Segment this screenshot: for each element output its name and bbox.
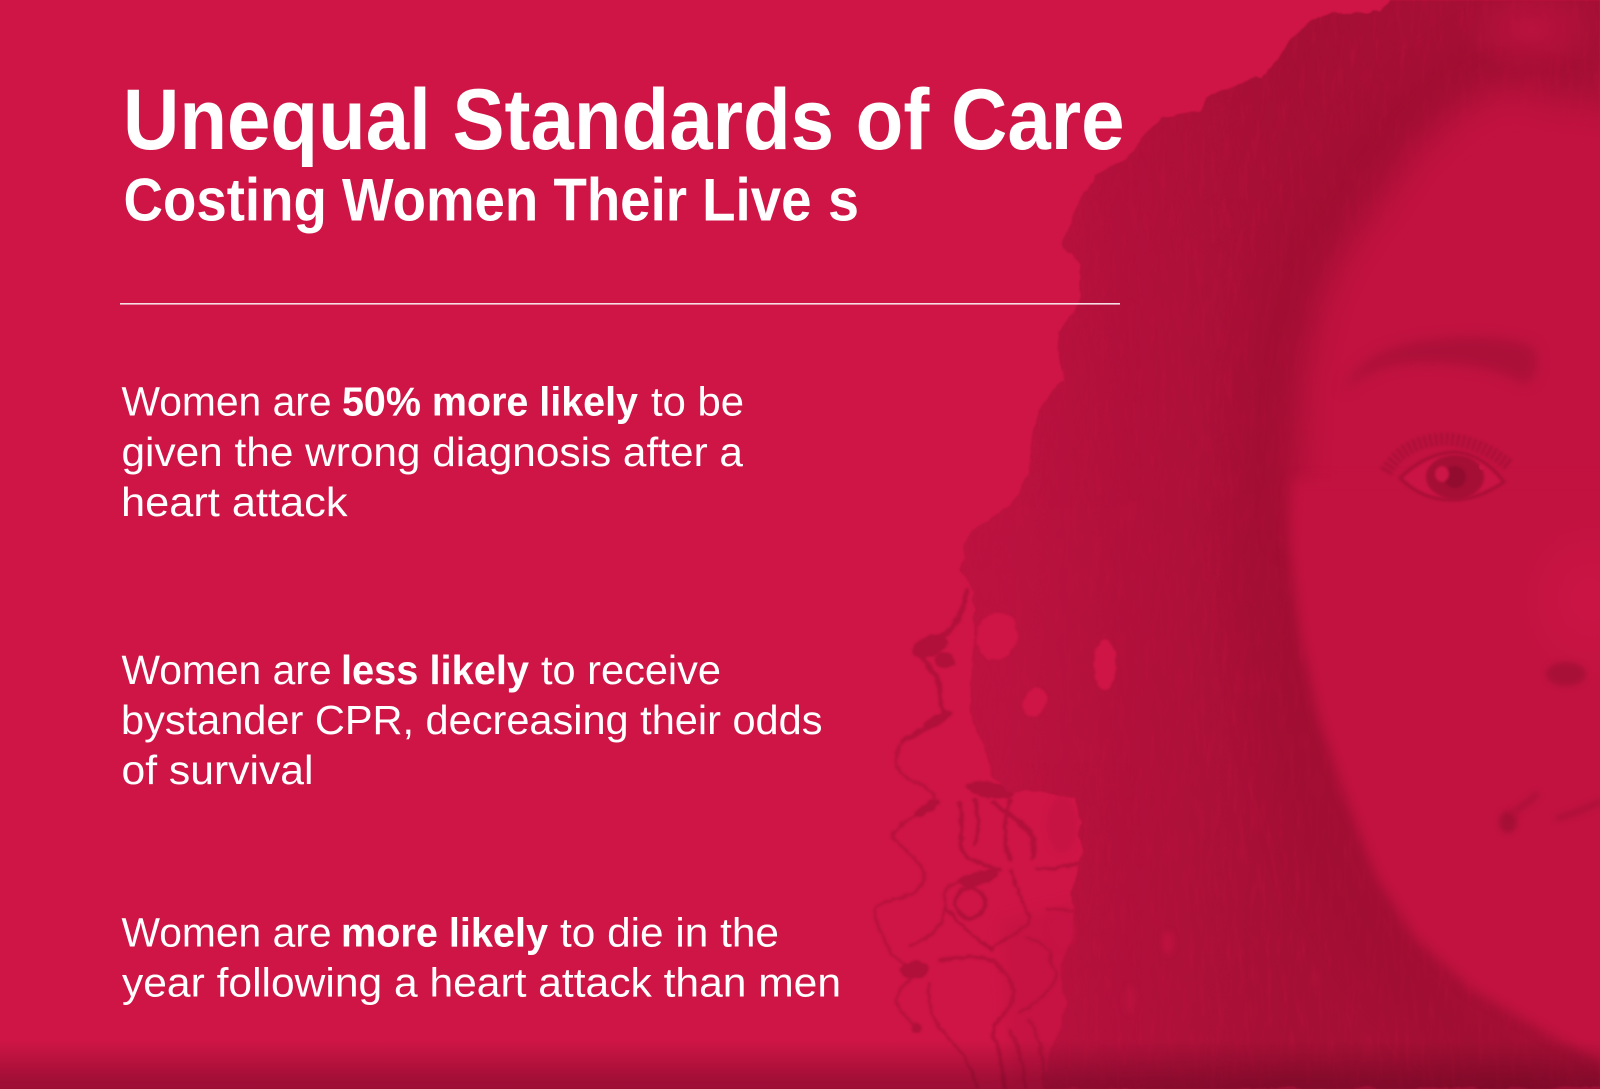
text block: death after heart attack: year following a heart attack than men: [122, 960, 841, 1006]
text block: death after heart attack: more likely: [341, 910, 548, 956]
eyebrow: [1343, 337, 1537, 392]
text block: bystander CPR: less likely: [341, 647, 529, 693]
text block: bystander CPR: of survival: [122, 747, 314, 793]
divider: [120, 303, 1120, 305]
hair: fine strand texture: [1298, 49, 1404, 976]
text block: wrong diagnosis: 50% more likely: [342, 379, 638, 425]
hair: main mass: [950, 0, 1600, 1089]
text block: wrong diagnosis: [121, 379, 744, 525]
text block: bystander CPR: [121, 647, 822, 793]
text block: bystander CPR: bystander CPR, decreasing their odds: [121, 697, 822, 743]
hair: lighter top strands: [1460, 0, 1600, 75]
hair: lighter patches near the curls: [1047, 797, 1174, 1014]
title: Unequal Standards of Care: [123, 72, 1124, 168]
nose: [1515, 515, 1600, 686]
eyelashes: [1386, 439, 1510, 472]
face: [1290, 85, 1600, 1072]
text block: bystander CPR: to receive: [541, 647, 721, 693]
text block: wrong diagnosis: given the wrong diagnosis after a: [122, 429, 743, 475]
eye: [1386, 439, 1510, 500]
subtitle: s: [828, 166, 859, 234]
photo: woman's face and curly hair: [875, 0, 1600, 1089]
hair: gaps between curls: [971, 608, 1116, 720]
hair: dark band beside the face: [1265, 30, 1540, 1085]
text block: death after heart attack: [122, 910, 841, 1006]
hair: thin curls on the left: [875, 590, 1087, 1089]
text block: wrong diagnosis: to be: [651, 379, 744, 425]
text block: wrong diagnosis: Women are: [122, 379, 332, 425]
bottom shadow: [0, 1040, 1600, 1089]
text block: bystander CPR: Women are: [122, 647, 332, 693]
lips: [1499, 795, 1600, 833]
text block: wrong diagnosis: heart attack: [121, 479, 348, 525]
hair: curl tufts: [901, 630, 1015, 1033]
hair: faint lower curl shadow: [1000, 900, 1080, 1089]
text block: death after heart attack: Women are: [122, 910, 332, 956]
subtitle: Costing Women Their Live: [124, 166, 812, 234]
text block: death after heart attack: to die in the: [560, 910, 779, 956]
